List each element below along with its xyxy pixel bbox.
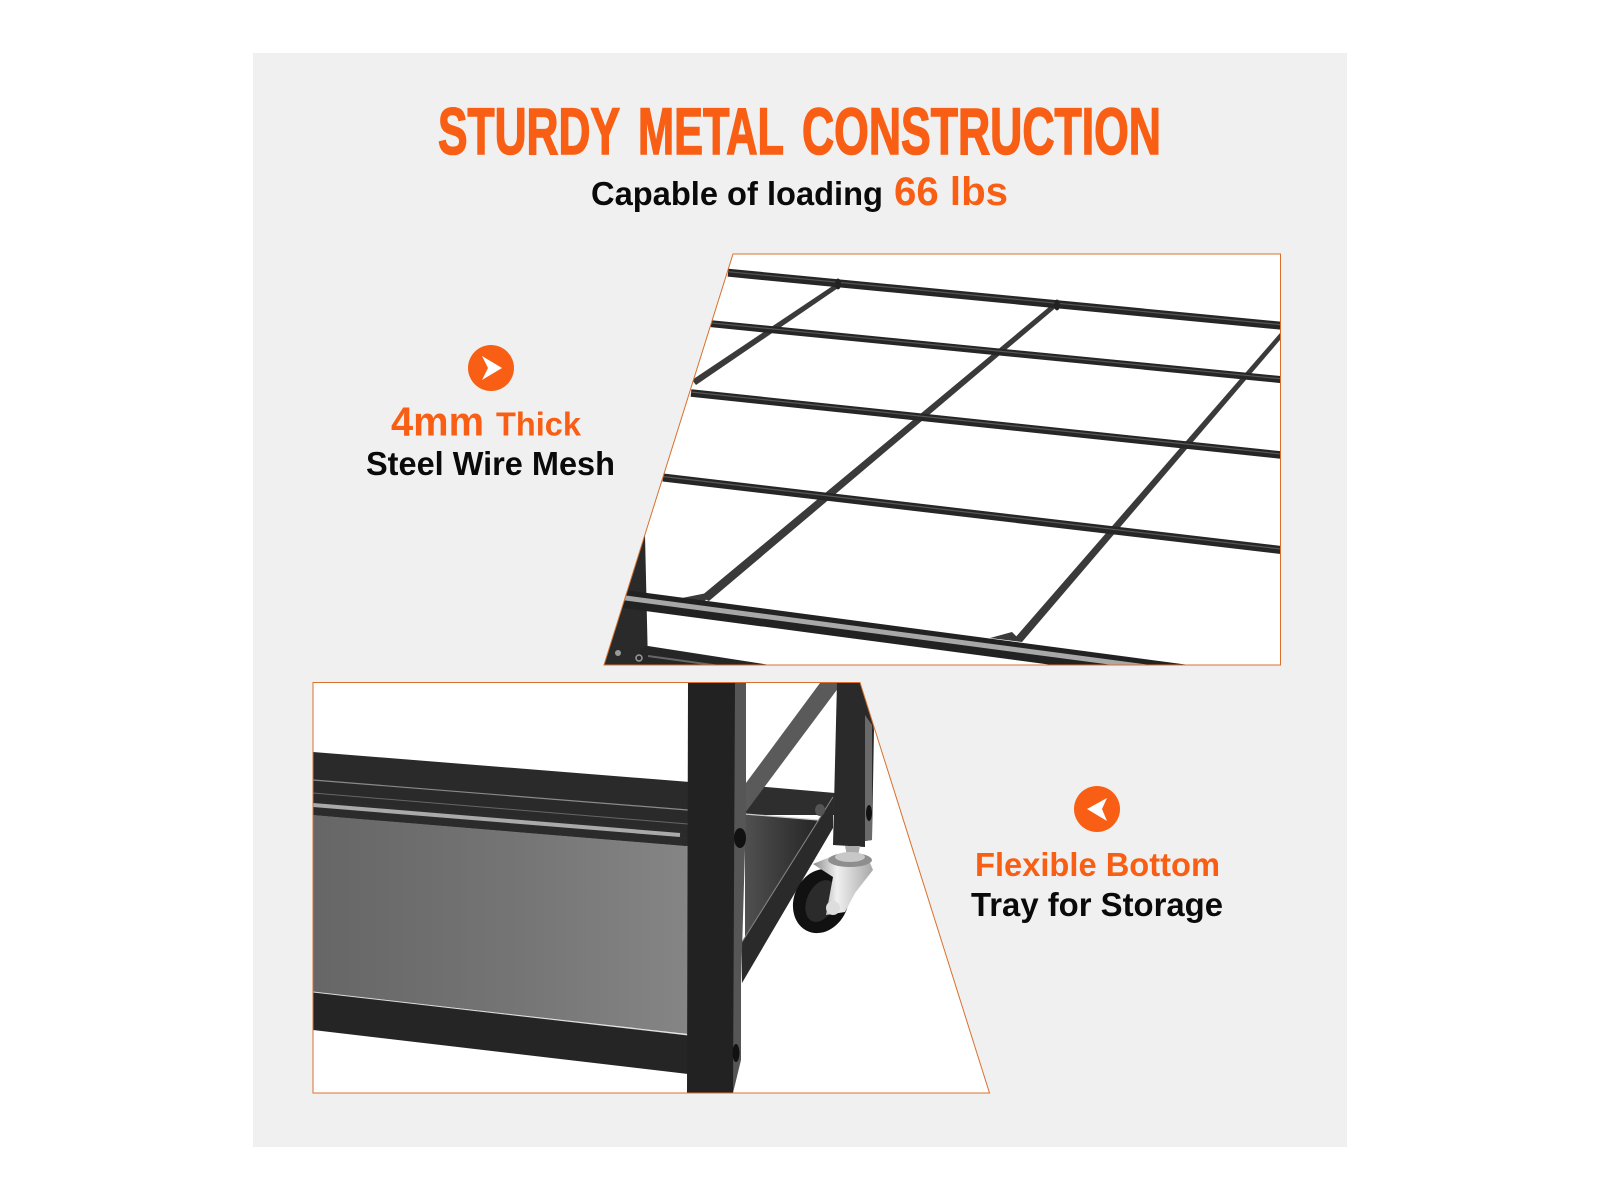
- title: [438, 94, 1161, 168]
- callout: 4mm thick steel wire mesh: [366, 398, 615, 482]
- wire joints: [835, 278, 1060, 310]
- tray side: [742, 797, 833, 983]
- diagonal wires: [682, 283, 1280, 642]
- panel: background: [253, 53, 1347, 1147]
- icon: arrow right: [468, 345, 514, 391]
- title: CONSTRUCTION: [802, 94, 1161, 168]
- tray panel: [313, 815, 688, 1034]
- title: METAL: [638, 94, 784, 168]
- callout: flexible bottom tray: Flexible Bottom: [975, 846, 1220, 883]
- caster: [792, 846, 873, 934]
- left leg: [604, 536, 648, 664]
- subtitle: [591, 170, 1008, 214]
- panel: bottom tray photo: [313, 682, 990, 1093]
- icon: arrow left: [1074, 786, 1120, 832]
- panel: wire mesh photo: [600, 254, 1281, 680]
- subtitle: Capable of loading: [591, 175, 883, 212]
- subtitle: 66 lbs: [894, 170, 1008, 214]
- callout: flexible bottom tray: [971, 846, 1223, 923]
- callout: 4mm thick steel wire mesh: Thick: [496, 406, 582, 442]
- tray back rail: [313, 752, 690, 850]
- front post: [687, 682, 746, 1093]
- lower rail: [313, 992, 688, 1074]
- horizontal wires: [663, 272, 1281, 550]
- front rail: [313, 799, 688, 846]
- tray floor: [745, 814, 818, 945]
- lower rear bar: [648, 646, 766, 664]
- rear post: [833, 682, 874, 847]
- callout: flexible bottom tray: Tray for Storage: [971, 886, 1223, 923]
- front tube: [623, 590, 1186, 664]
- callout: 4mm thick steel wire mesh: 4mm: [391, 398, 484, 444]
- bolts: [615, 650, 642, 661]
- diagonal brace: [743, 683, 842, 813]
- title: STURDY: [438, 94, 620, 168]
- callout: 4mm thick steel wire mesh: Steel Wire Mesh: [366, 445, 615, 482]
